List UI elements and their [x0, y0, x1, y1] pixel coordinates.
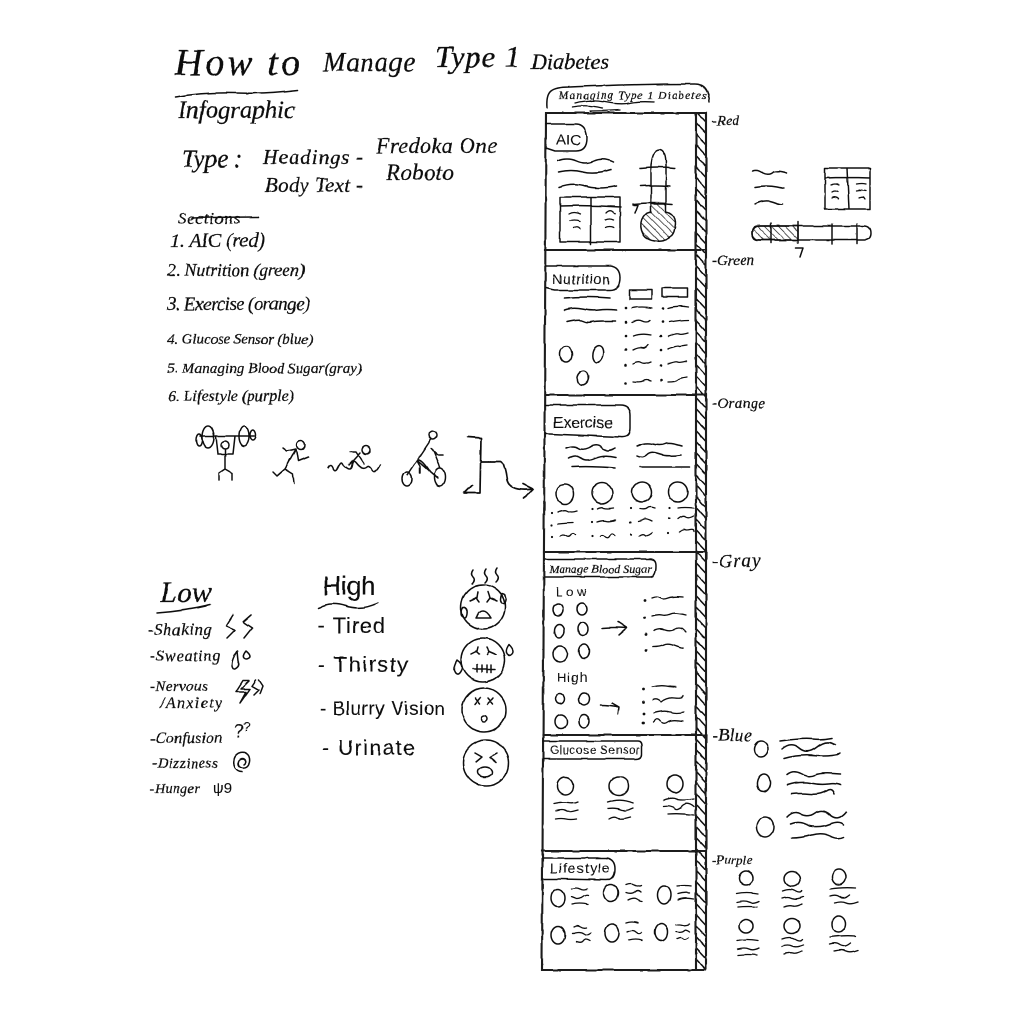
- section list: 4. Glucose Sensor (blue): [167, 332, 313, 348]
- panel: manage blood sugar: Low: [556, 585, 587, 599]
- icon: cyclist: [402, 431, 446, 486]
- section labels: [712, 114, 765, 867]
- low symptoms list: /Anxiety: [159, 695, 223, 712]
- high symptoms list: - Tired: [318, 613, 385, 638]
- low symptoms list: -Sweating: [150, 648, 220, 665]
- low symptom icons: ?: [243, 719, 250, 734]
- icon: thirsty face: [454, 638, 513, 682]
- high symptoms list: [318, 571, 445, 760]
- section list: 1. AIC (red): [170, 230, 265, 252]
- icon: weightlifter: [196, 426, 256, 480]
- type notes: Roboto: [385, 160, 454, 185]
- section labels: -Blue: [712, 725, 752, 745]
- section labels: -Purple: [712, 852, 752, 867]
- low symptom icons: [213, 615, 263, 797]
- high symptoms list: - Urinate: [322, 737, 415, 760]
- icon: swimmer: [328, 446, 380, 472]
- low symptoms list: Low: [159, 576, 212, 609]
- wireframe header tab: Managing Type 1 Diabetes: [558, 90, 707, 102]
- title: Type 1: [435, 39, 520, 74]
- panel: nutrition: Nutrition: [552, 271, 610, 287]
- low symptoms list: -Shaking: [148, 620, 212, 639]
- low symptoms list: -Dizziness: [152, 756, 218, 772]
- low symptoms list: [148, 576, 223, 797]
- thermometer: [633, 150, 675, 241]
- type notes: Type :: [182, 146, 242, 173]
- table: [560, 197, 621, 244]
- type notes: [182, 133, 497, 197]
- section labels: -Red: [712, 114, 740, 129]
- title: Manage: [322, 47, 415, 77]
- section list: 3. Exercise (orange): [166, 294, 310, 315]
- high symptoms list: - Thirsty: [318, 652, 408, 677]
- icon: runner: [273, 440, 308, 483]
- panel: exercise: Exercise: [553, 415, 613, 432]
- icon: shouting face: [463, 740, 509, 786]
- panel: manage blood sugar: High: [557, 670, 587, 685]
- title: Diabetes: [530, 49, 609, 74]
- wireframe frame with colour strip: [542, 113, 706, 970]
- section list: 5. Managing Blood Sugar(gray): [167, 361, 362, 377]
- panel: nutrition: [546, 266, 689, 386]
- section list: 2. Nutrition (green): [167, 260, 305, 281]
- section list: Sections: [178, 209, 240, 228]
- high symptoms list: - Blurry Vision: [320, 699, 445, 720]
- section labels: -Orange: [712, 396, 765, 412]
- arrow: to wireframe: [464, 437, 533, 498]
- low symptoms list: -Nervous: [150, 679, 208, 695]
- arrow: high: [601, 703, 619, 714]
- title: [174, 39, 609, 97]
- panel: A1C alternate layout: [752, 168, 871, 257]
- arrow: low: [602, 622, 627, 635]
- panel: exercise: [545, 405, 694, 538]
- wireframe header tab: [547, 84, 709, 111]
- panel: lifestyle alternate layout: [737, 869, 858, 955]
- type notes: Headings -: [262, 145, 363, 169]
- low symptom icons: ψ9: [213, 780, 232, 797]
- panel: manage blood sugar: [545, 559, 686, 729]
- low symptom icons: ?: [234, 721, 244, 741]
- subtitle: infographic: Infographic: [177, 97, 295, 124]
- type notes: Fredoka One: [375, 133, 497, 158]
- low symptoms list: -Hunger: [150, 782, 201, 797]
- section labels: -Green: [712, 253, 754, 269]
- panel: manage blood sugar: Manage Blood Sugar: [548, 562, 652, 576]
- panel: lifestyle: [543, 858, 694, 944]
- section labels: -Gray: [712, 551, 761, 572]
- section list: [166, 209, 362, 405]
- panel: A1C: [546, 124, 675, 244]
- high symptoms list: High: [322, 571, 376, 601]
- panel: glucose sensor: Glucose Sensor: [550, 745, 640, 757]
- low symptoms list: -Confusion: [150, 730, 222, 747]
- type notes: Body Text -: [265, 173, 363, 197]
- panel: glucose sensor: [543, 741, 694, 820]
- title: How to: [174, 42, 300, 84]
- panel: lifestyle: Lifestyle: [550, 860, 610, 876]
- icon: dizzy face: [462, 688, 506, 732]
- panel: A1C: AIC: [556, 132, 581, 149]
- section list: 6. Lifestyle (purple): [168, 388, 294, 405]
- icon: sweating face: [461, 568, 506, 629]
- panel: glucose sensor alternate layout: [754, 738, 846, 838]
